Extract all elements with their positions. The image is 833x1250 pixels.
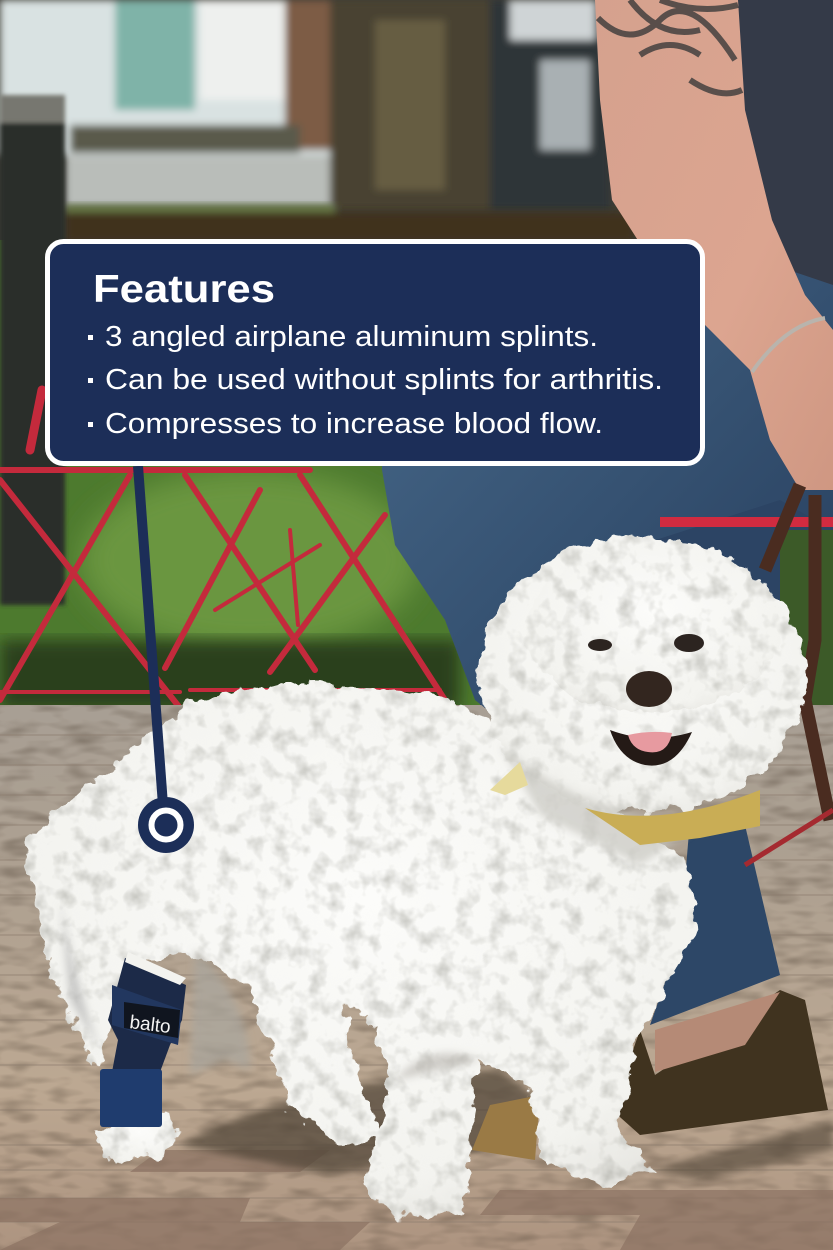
person: shirt	[730, 0, 833, 300]
pointer line and marker	[138, 466, 194, 853]
leg brace	[100, 952, 186, 1127]
background: red chair	[0, 390, 445, 708]
heading: Features	[93, 268, 275, 311]
dog: bandana	[585, 790, 760, 845]
feature list: 3 angled airplane aluminum splints.	[105, 321, 598, 353]
dog: body, head and legs	[26, 537, 806, 1219]
feature list	[88, 321, 663, 440]
feature list: Can be used without splints for arthritis.	[105, 364, 663, 396]
background: grass	[0, 240, 833, 710]
dog: eyes, nose and mouth	[588, 639, 612, 651]
brand logo: balto	[128, 1012, 172, 1038]
callout: features panel	[48, 242, 702, 464]
background: paving	[0, 705, 833, 1250]
feature list: Compresses to increase blood flow.	[105, 408, 603, 440]
person: tattooed arm and hand	[595, 0, 833, 490]
background: dark post	[0, 95, 65, 605]
person: jeans	[382, 240, 833, 1025]
background: building and tree	[0, 0, 833, 242]
chair seat and leash	[660, 485, 833, 865]
person: shoe	[472, 990, 828, 1160]
